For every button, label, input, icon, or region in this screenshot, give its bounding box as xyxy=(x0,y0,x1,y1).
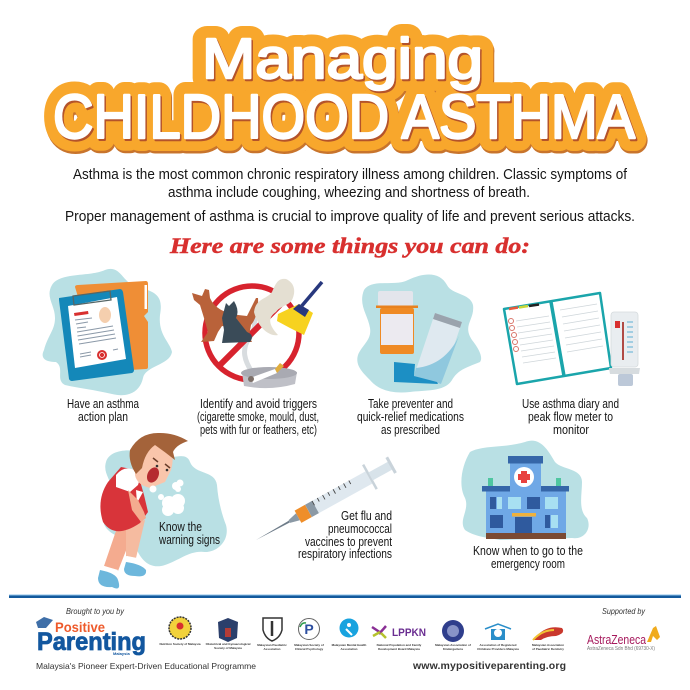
title: Managing xyxy=(202,27,483,91)
logo: MMHA xyxy=(332,618,367,651)
logo: Malaysian Paediatric Association: Malaysian Paediatric xyxy=(257,643,287,647)
icon: broom xyxy=(277,282,322,335)
logo: Malaysian Association of Paediatric Dentistry xyxy=(532,627,564,651)
logo: Obstetrical and Gynaecological Society of Malaysia: Obstetrical and Gynaecological xyxy=(206,642,251,646)
footer tagline: Malaysia's Pioneer Expert-Driven Educational Programme xyxy=(36,661,256,671)
icon: diary xyxy=(504,293,611,384)
title: CHILDHOOD ASTHMA xyxy=(53,83,636,152)
caption: Know the xyxy=(159,520,202,534)
caption: pneumococcal xyxy=(328,522,392,536)
intro text xyxy=(65,167,635,225)
caption: vaccines to prevent xyxy=(305,535,392,549)
title: Managing xyxy=(203,30,484,94)
panel: diary and peak flow meter xyxy=(504,293,640,437)
logo: Malaysian Society of Clinical Psychology: Clinical Psychology xyxy=(295,647,324,651)
caption: Take preventer and xyxy=(368,397,453,411)
logo: Malaysian Paediatric Association xyxy=(257,618,287,651)
logo: LPPKN xyxy=(372,626,426,651)
caption: quick-relief medications xyxy=(357,410,464,424)
icon: clipboard xyxy=(59,289,134,381)
icon: syringe xyxy=(249,452,399,552)
logo: Malaysian Society of Clinical Psychology: Malaysian Society of xyxy=(294,643,324,647)
caption: action plan xyxy=(78,410,128,424)
title: CHILDHOOD ASTHMA xyxy=(54,86,637,154)
caption: pets with fur or feathers, etc) xyxy=(200,423,317,437)
intro text: Asthma is the most common chronic respiratory illness among children. Classic symptoms of xyxy=(73,167,628,183)
logo: Malaysian Association of Paediatric Dentistry: of Paediatric Dentistry xyxy=(532,647,564,651)
title xyxy=(53,27,637,154)
title: CHILDHOOD ASTHMA xyxy=(54,85,637,154)
panel: emergency room xyxy=(461,441,589,571)
intro text: Proper management of asthma is crucial to improve quality of life and prevent serious attacks. xyxy=(65,209,635,225)
logo: Positive Parenting xyxy=(36,617,146,656)
footer rule xyxy=(9,594,681,598)
panel: action plan xyxy=(43,269,172,424)
footer: website: www.mypositiveparenting.org xyxy=(412,660,566,672)
title: Managing xyxy=(202,27,483,91)
logo: Nutrition Society of Malaysia: Nutrition Society of Malaysia xyxy=(159,642,201,646)
blob xyxy=(43,269,172,395)
logo: Malaysian Association of Paediatric Dentistry: Malaysian Association xyxy=(532,643,564,647)
panel: medications xyxy=(357,275,481,437)
logo: MMHA: Malaysian Mental Health xyxy=(332,643,367,647)
logo: PPBM xyxy=(477,624,519,651)
icon: pill bottle xyxy=(376,291,418,354)
logo: PPBM: Association of Registered xyxy=(479,643,517,647)
icon: inhaler xyxy=(394,313,462,384)
logo: AstraZeneca xyxy=(587,626,660,652)
logo: LPPKN: LPPKN xyxy=(392,627,426,639)
logo: Malaysian Association of Kindergartens xyxy=(435,620,471,651)
caption: Get flu and xyxy=(341,509,392,523)
caption: as prescribed xyxy=(381,423,440,437)
caption: emergency room xyxy=(491,557,565,571)
caption xyxy=(67,397,139,424)
logo: Malaysian Society of Clinical Psychology: P xyxy=(304,621,314,637)
logo: Malaysian Paediatric Association: Association xyxy=(263,647,281,651)
caption xyxy=(473,544,583,571)
logo: AstraZeneca: AstraZeneca Sdn Bhd (69730-X) xyxy=(587,646,655,652)
icon: peak flow meter xyxy=(609,312,640,386)
icon: coughing boy xyxy=(98,433,188,588)
icon: cigarette smoke xyxy=(245,318,255,372)
caption: warning signs xyxy=(158,533,220,547)
icon: cat xyxy=(222,301,252,343)
caption: Use asthma diary and xyxy=(522,397,619,411)
panel: vaccines xyxy=(249,452,399,561)
icon: hospital xyxy=(482,456,569,539)
partner logos xyxy=(159,617,564,651)
logo: Malaysian Society of Clinical Psychology xyxy=(294,618,324,651)
logo: Malaysian Association of Kindergartens: Kindergartens xyxy=(443,647,463,651)
caption: Know when to go to the xyxy=(473,544,583,558)
caption xyxy=(357,397,464,437)
caption: (cigarette smoke, mould, dust, xyxy=(197,410,319,424)
caption: peak flow meter to xyxy=(528,410,613,424)
icon: ashtray and cigarette xyxy=(241,363,297,388)
logo: Malaysian Association of Kindergartens: Malaysian Association of xyxy=(435,643,471,647)
icon: cough clouds xyxy=(150,480,185,516)
logo: Obstetrical and Gynaecological Society of Malaysia xyxy=(206,618,251,650)
icon: folder xyxy=(75,281,148,370)
icon: prohibition sign xyxy=(205,286,299,380)
logo: Positive Parenting: Positive xyxy=(55,619,105,635)
footer: supported by: Supported by xyxy=(602,607,646,616)
title: CHILDHOOD ASTHMA xyxy=(53,83,636,152)
panel: warning signs xyxy=(98,433,227,588)
icon: dog xyxy=(192,289,258,342)
blob xyxy=(357,275,481,392)
title: Managing xyxy=(204,29,484,93)
caption: monitor xyxy=(553,423,589,437)
blob xyxy=(103,450,227,566)
logo: MMHA: Association xyxy=(340,647,358,651)
intro text: asthma include coughing, wheezing and shortness of breath. xyxy=(168,185,530,201)
logo: PPBM: Childcare Providers Malaysia xyxy=(477,647,519,651)
caption xyxy=(197,397,319,437)
footer: brought to you by: Brought to you by xyxy=(66,607,125,616)
panel: triggers xyxy=(192,279,322,437)
logo: Nutrition Society of Malaysia xyxy=(159,617,201,646)
logo: Positive Parenting: Malaysia xyxy=(113,651,130,656)
caption xyxy=(522,397,619,437)
caption xyxy=(158,520,220,547)
caption: Identify and avoid triggers xyxy=(200,397,317,411)
caption: respiratory infections xyxy=(298,547,392,561)
logo: LPPKN: National Population and Family xyxy=(377,643,422,647)
blob xyxy=(461,441,589,540)
caption xyxy=(298,509,392,561)
icon: feathers xyxy=(254,279,294,335)
heading: things you can do: Here are some things you can do: xyxy=(169,233,530,258)
caption: Have an asthma xyxy=(67,397,139,411)
logo: Positive Parenting: Parenting xyxy=(37,628,146,656)
logo: LPPKN: Development Board Malaysia xyxy=(378,647,420,651)
logo: AstraZeneca: AstraZeneca xyxy=(587,633,646,647)
logo: Obstetrical and Gynaecological Society of Malaysia: Society of Malaysia xyxy=(214,646,242,650)
